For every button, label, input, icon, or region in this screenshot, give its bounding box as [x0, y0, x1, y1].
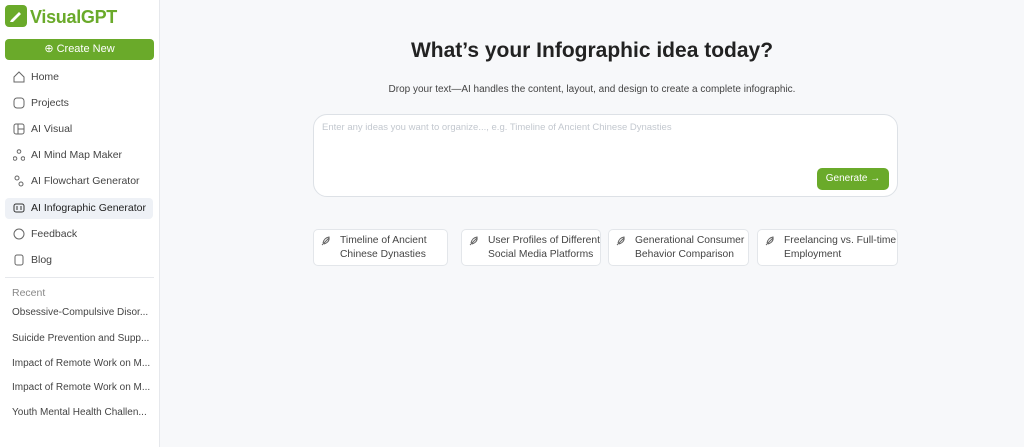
card: generational: Generational Consumer	[635, 235, 744, 246]
menu: home: Home	[31, 71, 59, 83]
card: freelancing: Employment	[784, 249, 841, 260]
icon: logo pencil	[5, 5, 27, 27]
button: create new: ⊕ Create New	[44, 43, 115, 55]
card: dynasties: Chinese Dynasties	[340, 249, 426, 260]
menu: blog	[14, 254, 52, 266]
card: generational	[608, 229, 749, 266]
menu: mind map: AI Mind Map Maker	[31, 149, 122, 161]
card: dynasties	[313, 229, 448, 266]
menu: feedback: Feedback	[31, 228, 77, 240]
button: generate: Generate →	[826, 173, 880, 184]
menu: infographic active	[5, 198, 153, 219]
card: generational: Behavior Comparison	[635, 249, 734, 260]
card: social media: User Profiles of Different	[488, 235, 600, 246]
menu: blog: Blog	[31, 254, 52, 266]
input box	[313, 114, 898, 197]
brand name: VisualGPT	[30, 7, 117, 27]
recent heading: Recent	[12, 287, 45, 299]
recent items: Youth Mental Health Challen...	[12, 407, 147, 418]
button: create new	[5, 39, 154, 60]
menu: projects: Projects	[31, 97, 69, 109]
card: social media: Social Media Platforms	[488, 249, 593, 260]
card: dynasties: Timeline of Ancient	[340, 235, 427, 246]
button: generate	[817, 168, 889, 190]
placeholder: Enter any ideas you want to organize..., e.g. Timeline of Ancient Chinese Dynasties	[322, 122, 672, 133]
menu: ai visual: AI Visual	[31, 123, 72, 135]
card: freelancing: Freelancing vs. Full-time	[784, 235, 896, 246]
recent items: Impact of Remote Work on M...	[12, 358, 150, 369]
logo	[5, 5, 118, 27]
subtitle: Drop your text—AI handles the content, layout, and design to create a complete infographic.	[389, 84, 795, 95]
card: social media	[461, 229, 601, 266]
menu: projects	[14, 97, 69, 109]
menu: flowchart: AI Flowchart Generator	[31, 175, 140, 187]
card: freelancing	[757, 229, 898, 266]
sidebar	[0, 0, 160, 447]
recent items: Obsessive-Compulsive Disor...	[12, 307, 148, 318]
recent items	[12, 307, 150, 418]
title: What’s your Infographic idea today?	[411, 39, 773, 62]
recent items: Suicide Prevention and Supp...	[12, 333, 149, 344]
menu: infographic active: AI Infographic Generator	[31, 202, 146, 214]
menu: home	[14, 71, 59, 83]
recent items: Impact of Remote Work on M...	[12, 382, 150, 393]
